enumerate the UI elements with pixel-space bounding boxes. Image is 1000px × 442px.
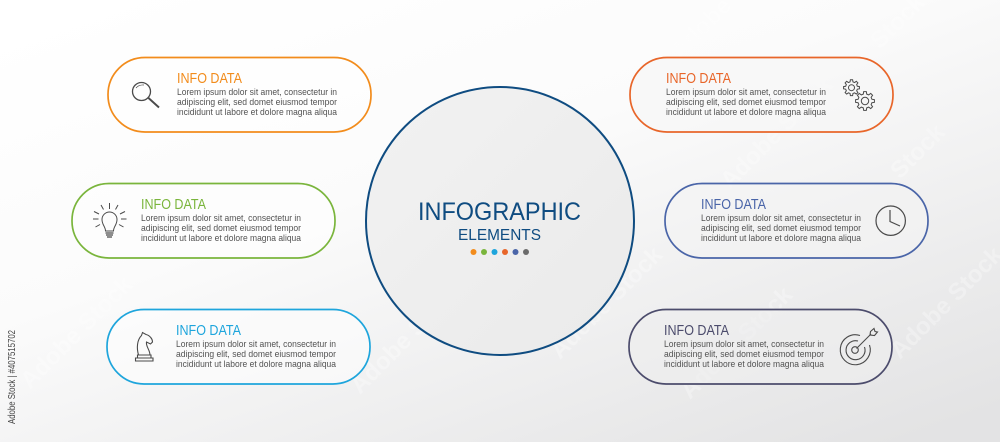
body text: adipiscing elit, sed domet eiusmod tempor — [141, 223, 301, 234]
body text — [141, 213, 302, 244]
panel: idea — [72, 184, 335, 258]
body text: Lorem ipsum dolor sit amet, consectetur in — [141, 213, 301, 224]
body text: Lorem ipsum dolor sit amet, consectetur in — [177, 87, 337, 98]
stock id label: Adobe Stock | #407515702 — [6, 330, 18, 424]
heading: INFO DATA — [176, 323, 241, 339]
body text: adipiscing elit, sed domet eiusmod tempor — [666, 97, 826, 108]
body text — [176, 339, 337, 370]
body text: adipiscing elit, sed domet eiusmod tempor — [177, 97, 337, 108]
body text: Lorem ipsum dolor sit amet, consectetur in — [701, 213, 861, 224]
icon: chess knight — [136, 332, 153, 361]
text: Adobe Stock — [375, 71, 498, 194]
icon: magnifier — [132, 82, 159, 108]
body text: adipiscing elit, sed domet eiusmod tempor — [176, 349, 336, 360]
text: Adobe Stock — [545, 241, 668, 364]
body text — [666, 87, 827, 118]
central circle — [366, 87, 634, 355]
panel: time — [665, 184, 928, 258]
heading: INFO DATA — [664, 323, 729, 339]
text: Adobe Stock — [715, 71, 838, 194]
body text: incididunt ut labore et dolore magna aliqua — [177, 107, 338, 118]
body text — [701, 213, 862, 244]
body text: incididunt ut labore et dolore magna aliqua — [666, 107, 827, 118]
panel: settings — [630, 58, 893, 132]
body text: Lorem ipsum dolor sit amet, consectetur in — [666, 87, 826, 98]
text: Adobe Stock — [15, 271, 138, 394]
text: Adobe Stock — [675, 281, 798, 404]
body text — [664, 339, 825, 370]
body text — [177, 87, 338, 118]
subheading: elements: ELEMENTS — [458, 227, 541, 244]
body text: incididunt ut labore et dolore magna aliqua — [664, 359, 825, 370]
body text: incididunt ut labore et dolore magna aliqua — [141, 233, 302, 244]
heading: infographic: INFOGRAPHIC — [418, 198, 581, 226]
text: Adobe Stock — [35, 71, 158, 194]
heading: INFO DATA — [177, 71, 242, 87]
text: Adobe Stock — [345, 276, 468, 399]
icon: target — [840, 328, 878, 365]
icon: clock — [876, 206, 905, 235]
icon: gears — [844, 80, 874, 110]
panel: strategy — [107, 310, 370, 384]
panel: target — [629, 310, 892, 384]
heading: INFO DATA — [701, 197, 766, 213]
body text: incididunt ut labore et dolore magna aliqua — [701, 233, 862, 244]
body text: adipiscing elit, sed domet eiusmod tempor — [664, 349, 824, 360]
icon: light bulb — [93, 203, 126, 237]
body text: adipiscing elit, sed domet eiusmod tempor — [701, 223, 861, 234]
heading: INFO DATA — [141, 197, 206, 213]
heading: INFO DATA — [666, 71, 731, 87]
colour dots — [470, 249, 529, 255]
body text: Lorem ipsum dolor sit amet, consectetur in — [176, 339, 336, 350]
body text: Lorem ipsum dolor sit amet, consectetur in — [664, 339, 824, 350]
text: Stock — [885, 118, 951, 184]
body text: incididunt ut labore et dolore magna aliqua — [176, 359, 337, 370]
panel: search — [108, 58, 371, 132]
